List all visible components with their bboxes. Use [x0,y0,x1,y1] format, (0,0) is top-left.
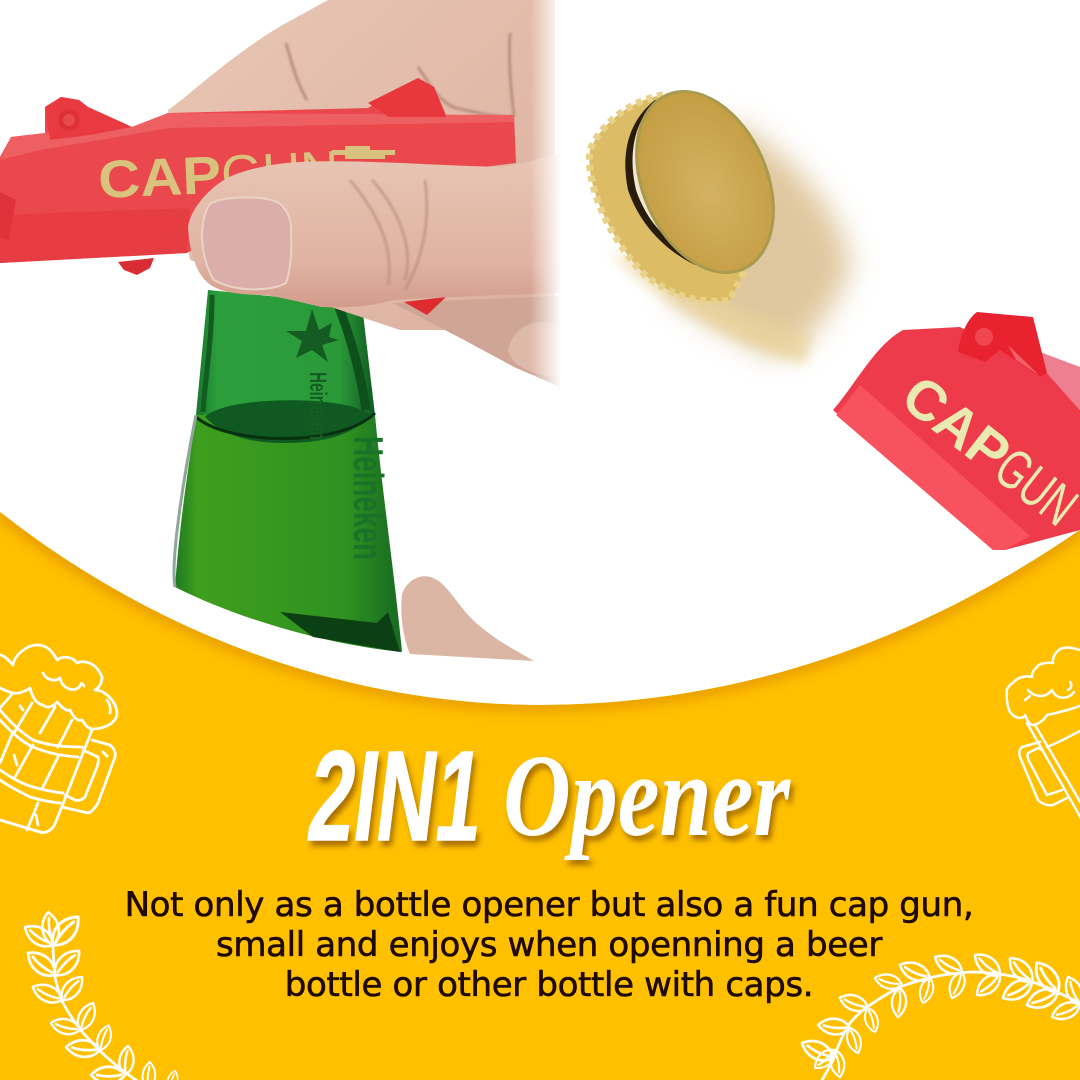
yellow background below curve [0,512,1080,1080]
white fade between photos [530,0,562,400]
white photo area with curved bottom [0,0,1080,705]
photo: thumb [188,153,560,307]
photo: green bottle [174,290,402,652]
photo: red cap gun [0,78,516,275]
wreath branch right [798,949,1080,1080]
wreath branch left [21,911,180,1080]
flying bottle cap with motion blur [589,70,850,365]
title: drop shadow and text: 2IN1 [302,725,491,868]
photo: hand back [168,0,555,330]
description text: small and enjoys when openning a beer [216,925,882,965]
lower finger at bottle [401,576,534,661]
cap gun logo text: CAPGUN [97,141,340,210]
description text: bottle or other bottle with caps. [285,965,813,1005]
title: drop shadow and text [302,725,794,874]
bottle small label: Heineken [304,372,331,440]
photo: lower fingers [393,296,560,387]
icon: beer mug right [1007,648,1080,820]
title: drop shadow and text: Opener [503,730,791,861]
curve inner shadow [0,512,1080,705]
bottle large label: Heineken [345,436,392,560]
small cap gun at right [833,312,1080,550]
description text: Not only as a bottle opener but also a fun cap gun, [125,885,973,925]
title: drop shadow and text: Opener [506,735,794,866]
title: drop shadow and text: 2IN1 [305,731,494,874]
icon: beer mug left [0,645,117,833]
description text [125,885,973,1005]
bottle star [286,309,339,362]
